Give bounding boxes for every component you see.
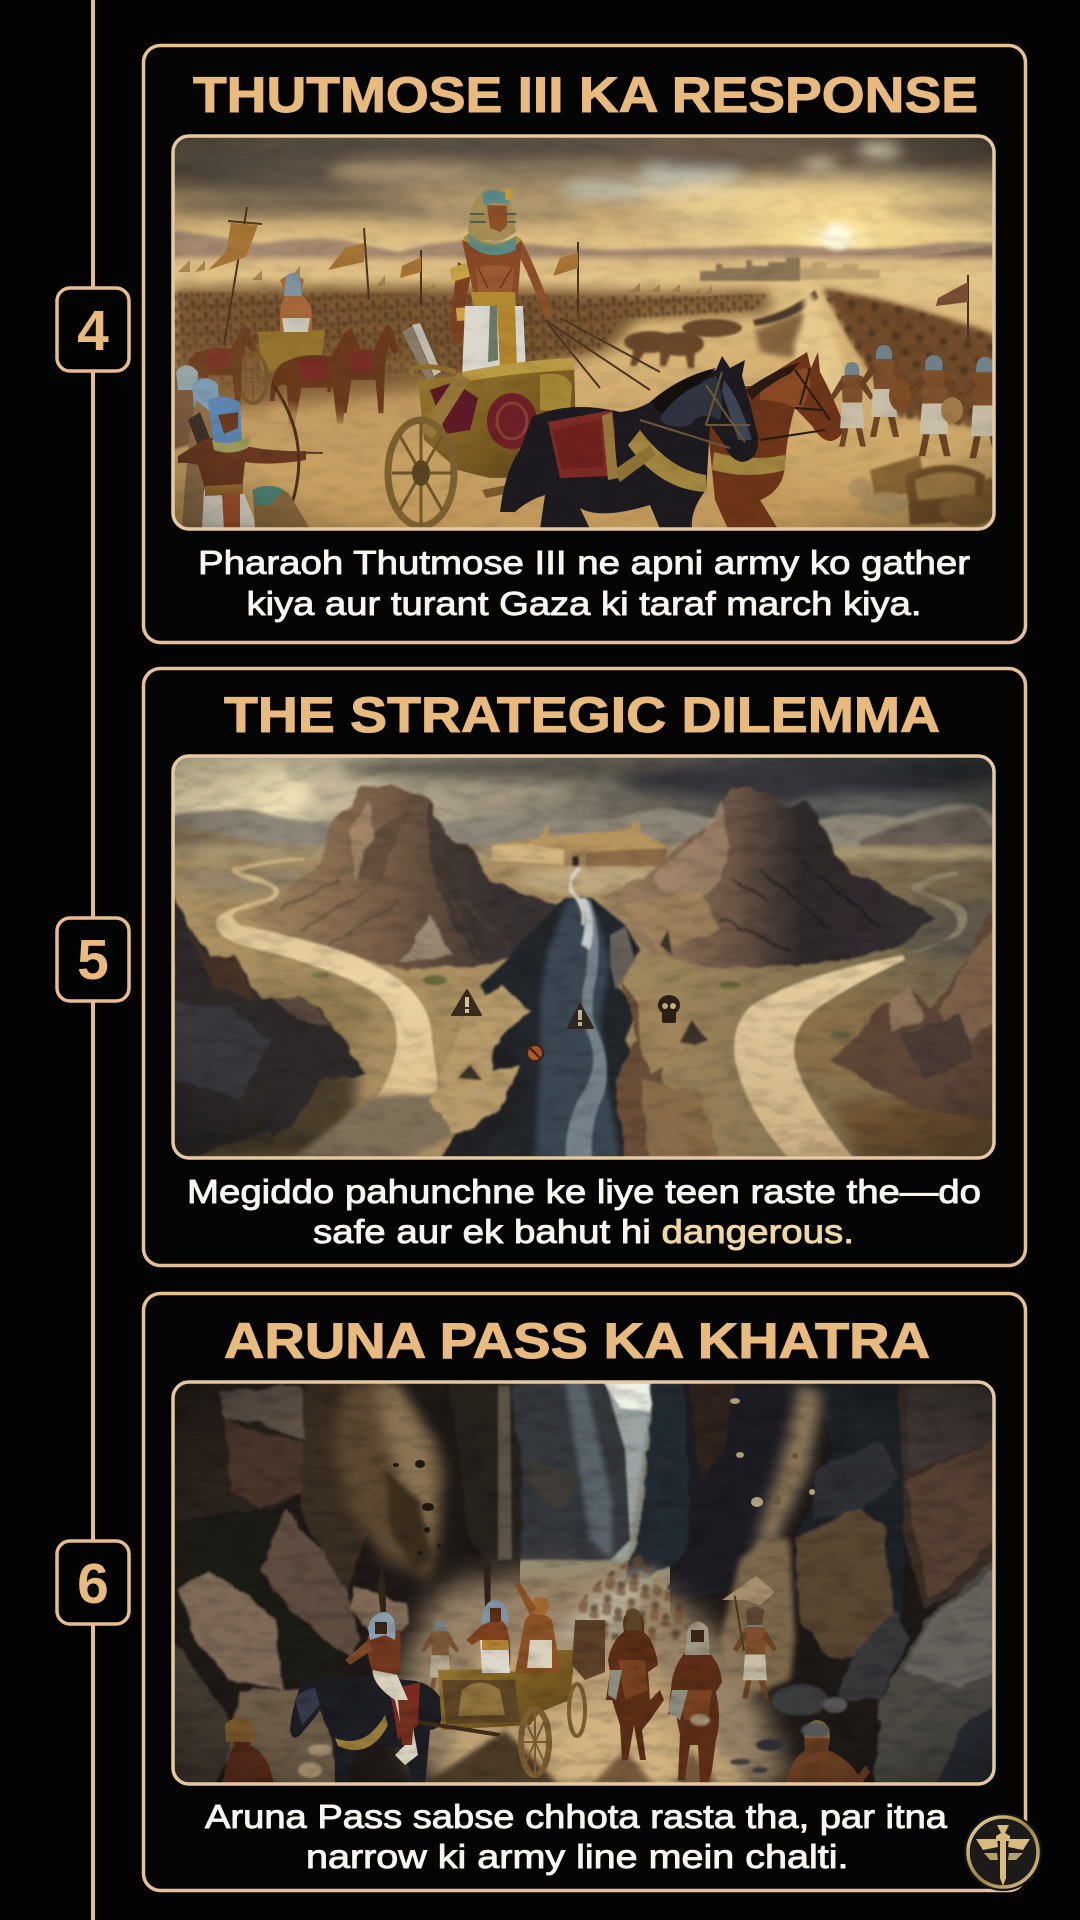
distant fortress (700, 257, 880, 281)
scattered boulders and scrub (248, 925, 850, 1145)
marching road and army columns (174, 276, 992, 446)
no-entry marker (527, 1045, 543, 1061)
pharaoh on chariot (450, 188, 552, 378)
royal chariot (388, 323, 584, 526)
description text: kiya aur turant Gaza ki taraf march kiya. (246, 585, 922, 622)
warning triangle in chasm (568, 1004, 593, 1028)
step badge 4: 4 (77, 299, 109, 363)
step badge 5: 5 (77, 928, 109, 992)
illustration frame (173, 1382, 994, 1784)
distant hills (174, 229, 992, 264)
black horse (500, 356, 758, 529)
warning triangle left (452, 990, 481, 1015)
warning signs (452, 990, 680, 1061)
sky and clouds (174, 138, 992, 250)
description text: Aruna Pass sabse chhota rasta tha, par itna (205, 1798, 948, 1835)
step badge 6 (57, 1541, 129, 1624)
desert ground (172, 264, 996, 532)
dust-filled canyon floor (395, 1565, 790, 1786)
illustration frame (173, 756, 994, 1158)
stormy sky (175, 758, 992, 817)
heading: THUTMOSE III KA RESPONSE (193, 67, 978, 123)
panel: Thutmose III response (144, 46, 1050, 642)
panel: the strategic dilemma (130, 668, 1030, 1266)
archer and escorts (172, 365, 323, 529)
right cliff walls (625, 1381, 995, 1786)
setting sun (824, 224, 850, 250)
left winding road (216, 857, 440, 1100)
illustration frame (173, 136, 994, 529)
left dark crag (172, 895, 365, 1160)
right rock formation (830, 910, 995, 1120)
golden chariot (418, 1552, 605, 1775)
panel: Aruna Pass ka khatra (144, 1294, 1026, 1890)
armoured rider on black horse (290, 1565, 442, 1786)
step badge 6: 6 (77, 1552, 109, 1616)
right winding road (910, 870, 968, 954)
timeline line (91, 0, 95, 1920)
skull marker (658, 995, 680, 1023)
heading: ARUNA PASS KA KHATRA (224, 1313, 930, 1369)
distant mountains (174, 802, 992, 850)
reins (545, 318, 660, 390)
left boulders (172, 1381, 410, 1786)
supply bundles (848, 455, 998, 526)
walled city (492, 822, 667, 866)
mounted riders (606, 1608, 722, 1785)
illustration: pharaoh's chariot and marching army (174, 138, 992, 528)
plain (172, 850, 996, 1160)
foot soldiers (224, 1596, 870, 1786)
description text: safe aur ek bahut hi dangerous. (313, 1213, 854, 1250)
war banners (178, 207, 968, 345)
description text: Megiddo pahunchne ke liye teen raste the—do (187, 1173, 981, 1210)
description text: narrow ki army line mein chalti. (306, 1838, 848, 1875)
description text (205, 1798, 948, 1875)
illustration: narrow canyon rockfall (172, 1381, 996, 1786)
brown horse (705, 352, 844, 529)
description text (187, 1173, 981, 1250)
left mountain (240, 783, 568, 970)
heading: THE STRATEGIC DILEMMA (224, 687, 940, 743)
illustration: three routes to Megiddo (174, 758, 992, 1156)
central dangerous chasm (430, 868, 720, 1159)
distant marching column (575, 1550, 690, 1640)
foreground infantry (830, 345, 992, 458)
logo emblem: winged sword (964, 1813, 1042, 1891)
right mountain (598, 785, 936, 970)
loose stones on floor (298, 1684, 847, 1778)
background chariot and horses (187, 273, 400, 424)
far canyon light and walls (448, 1381, 670, 1641)
step badge 4 (57, 288, 129, 371)
right rockfall dust (720, 1381, 822, 1700)
step badge 5 (57, 918, 129, 1001)
left rockfall dust plume (335, 1381, 445, 1580)
description text (198, 544, 970, 622)
description text: Pharaoh Thutmose III ne apni army ko gather (198, 544, 970, 581)
